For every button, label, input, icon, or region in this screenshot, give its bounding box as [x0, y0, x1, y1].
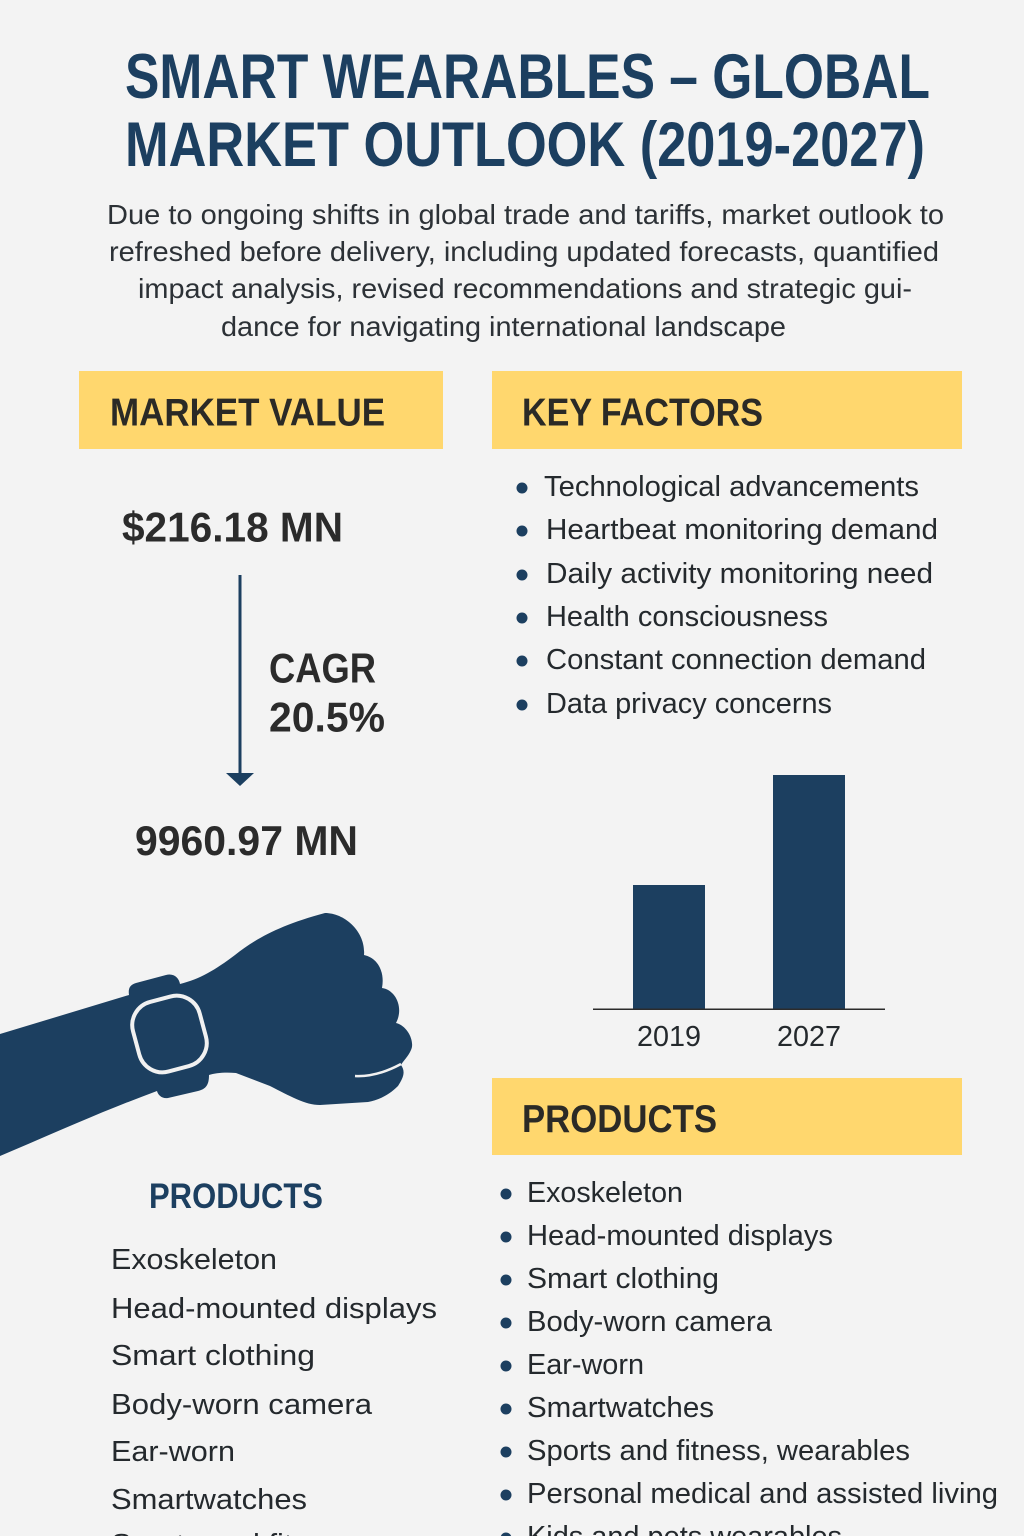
products list (right): Head-mounted displays: [527, 1220, 833, 1252]
panel heading: market value: [79, 371, 443, 449]
products list (right): Smart clothing: [527, 1263, 719, 1295]
panel heading: market value: MARKET VALUE: [110, 392, 385, 434]
intro text: [107, 199, 944, 342]
bar chart: market value 2019 vs 2027: [593, 775, 885, 1053]
products list (left): Ear-worn: [111, 1436, 235, 1468]
ending market value: 9960.97 MN: [135, 817, 358, 864]
starting market value: $216.18 MN: [122, 504, 343, 550]
icon: arm with smartwatch: [0, 913, 412, 1156]
intro text: refreshed before delivery, including updated forecasts, quantified: [109, 236, 939, 267]
products list (right): [500, 1177, 998, 1536]
key factors list: Heartbeat monitoring demand: [546, 514, 938, 546]
key factors list: Data privacy concerns: [546, 688, 832, 720]
panel heading: key factors: KEY FACTORS: [522, 392, 763, 434]
key factors list: Constant connection demand: [546, 644, 926, 676]
products list (left): Exoskeleton: [111, 1244, 277, 1276]
products list (right): Ear-worn: [527, 1349, 644, 1381]
products list (right): Exoskeleton: [527, 1177, 683, 1209]
bar chart: market value 2019 vs 2027: 2019: [637, 1021, 701, 1053]
panel heading: key factors: [492, 371, 962, 449]
key factors list: Health consciousness: [546, 601, 828, 633]
arrow: growth from 2019 to 2027: [226, 575, 254, 786]
CAGR label: [269, 644, 385, 740]
CAGR label: 20.5%: [269, 694, 385, 740]
heading: products (left): PRODUCTS: [149, 1177, 323, 1216]
products list (left): Head-mounted displays: [111, 1293, 437, 1325]
key factors list: [516, 471, 938, 720]
products list (left): Smart clothing: [111, 1340, 315, 1372]
intro text: Due to ongoing shifts in global trade and tariffs, market outlook to: [107, 199, 944, 230]
products list (left): Smartwatches: [111, 1484, 307, 1516]
products list (right): Sports and fitness, wearables: [527, 1435, 910, 1467]
intro text: impact analysis, revised recommendations and strategic gui-: [138, 273, 912, 304]
panel heading: products (right): [492, 1078, 962, 1155]
key factors list: Daily activity monitoring need: [546, 558, 933, 590]
products list (right): Smartwatches: [527, 1392, 714, 1424]
products list (left): [111, 1244, 437, 1536]
bar chart: market value 2019 vs 2027: 2027: [777, 1021, 841, 1053]
products list (left): Body-worn camera: [111, 1389, 373, 1421]
panel heading: products (right): PRODUCTS: [522, 1098, 717, 1141]
intro text: dance for navigating international landscape: [221, 311, 786, 342]
key factors list: Technological advancements: [544, 471, 919, 503]
CAGR label: CAGR: [269, 644, 376, 692]
products list (right): Body-worn camera: [527, 1306, 773, 1338]
title: [125, 42, 930, 180]
products list (right): Personal medical and assisted living: [527, 1478, 998, 1510]
